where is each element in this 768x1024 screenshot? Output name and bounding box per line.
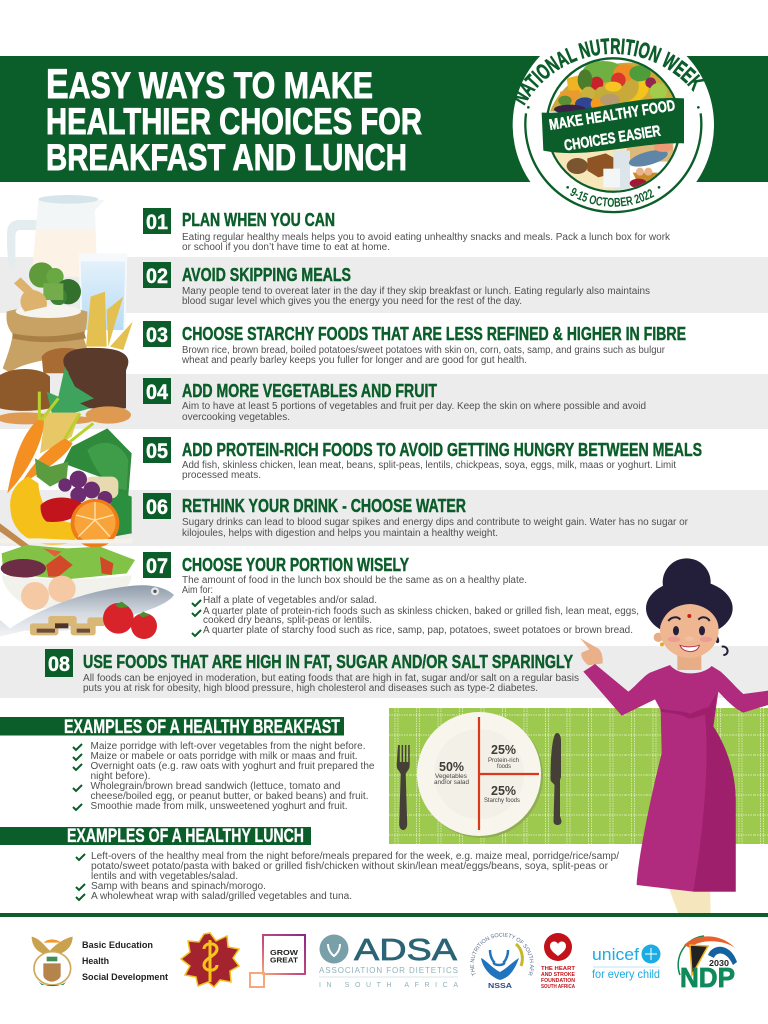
logo: Grow Great: GROW <box>270 948 299 957</box>
departments text: Basic Education <box>82 940 153 950</box>
item 06 <box>143 493 689 539</box>
heading 01: PLAN WHEN YOU CAN <box>182 210 335 230</box>
breakfast check marks <box>73 744 82 810</box>
body 07: cooked dry beans, split-peas or lentils. <box>203 615 372 626</box>
body 07: Half a plate of vegetables and/or salad. <box>203 595 377 606</box>
item 08 <box>45 649 579 694</box>
footer rule <box>0 913 768 917</box>
lentils <box>0 406 131 424</box>
lunch heading <box>0 825 311 847</box>
logo: coat of arms <box>32 937 73 986</box>
body 01 <box>182 232 671 253</box>
logo: NDP 2030 <box>678 936 737 993</box>
body 08 <box>83 673 579 694</box>
legs <box>668 887 711 915</box>
logo: Heart and Stroke Foundation: FOUNDATION <box>541 978 575 984</box>
item 03 <box>143 321 686 366</box>
logo: ADSA: IN SOUTH AFRICA <box>319 982 458 989</box>
item 04 <box>143 378 646 423</box>
logo: UNICEF: unicef <box>592 945 639 964</box>
plate: 25% <box>491 784 516 798</box>
body 07: A quarter plate of protein-rich foods such as skinless chicken, baked or grilled fish, lean meat, eggs, <box>203 606 639 617</box>
departments text <box>82 940 168 982</box>
item 01 <box>143 208 671 253</box>
heading 08: USE FOODS THAT ARE HIGH IN FAT, SUGAR AND/OR SALT SPARINGLY <box>83 652 573 672</box>
title: HEALTHIER CHOICES FOR <box>46 101 422 142</box>
lunch list: lentils and with vegetables/salad. <box>91 871 238 882</box>
logo: UNICEF <box>592 944 660 981</box>
breakfast list: cheese/boiled egg, or peanut butter, or baked beans) and fruit. <box>90 791 368 802</box>
body 04: Aim to have at least 5 portions of vegetables and fruit per day. Keep the skin on where possible and avoid <box>182 401 646 412</box>
plate: Vegetables <box>435 774 467 780</box>
grapes and mint <box>35 458 118 506</box>
glass of water <box>79 253 127 330</box>
departments text: Health <box>82 956 109 966</box>
dress <box>583 664 768 892</box>
body 03: wheat and pearly barley keeps you fuller for longer and are good for gut health. <box>181 355 527 366</box>
logo: National Nutrition Week badge: NATIONAL NUTRITION WEEK <box>516 38 704 106</box>
food column illustration <box>0 195 174 639</box>
departments text: Social Development <box>82 972 168 982</box>
icon: fork <box>397 745 410 830</box>
heading 06: RETHINK YOUR DRINK - CHOOSE WATER <box>182 496 466 516</box>
breakfast heading: EXAMPLES OF A HEALTHY BREAKFAST <box>64 716 340 738</box>
logo: ADSA: ADSA <box>354 932 457 967</box>
fish <box>0 585 174 637</box>
logo: NSSA <box>470 932 534 990</box>
title: EASY WAYS TO MAKE <box>46 60 373 107</box>
number 01: 01 <box>146 211 168 234</box>
item 07 <box>143 552 639 636</box>
body 07: Aim for: <box>182 585 213 596</box>
body 05: processed meats. <box>182 470 261 481</box>
body 06: kilojoules, helps with digestion and helps you maintain a healthy weight. <box>182 528 498 539</box>
lunch list: Samp with beans and spinach/morogo. <box>91 881 266 892</box>
orange <box>71 499 119 548</box>
body 02: blood sugar level which gives you the energy you need for the rest of the day. <box>182 296 522 307</box>
number 06: 06 <box>146 496 168 519</box>
logo: NSSA: NSSA <box>488 981 513 990</box>
icon: knife <box>550 733 562 825</box>
body 03 <box>181 345 666 366</box>
logo: ADSA <box>319 932 458 989</box>
bowl <box>2 575 132 608</box>
cabbage greens <box>63 428 132 537</box>
heading 04: ADD MORE VEGETABLES AND FRUIT <box>182 381 437 401</box>
body 05 <box>182 460 676 481</box>
eggs <box>21 576 76 610</box>
plate: foods <box>497 764 511 770</box>
plate: and/or salad <box>434 780 469 786</box>
body 01: or school if you don’t have time to eat at home. <box>182 242 390 253</box>
body 02 <box>182 286 650 307</box>
badge ring text <box>524 54 703 106</box>
woman pointing <box>580 558 768 915</box>
body 04: overcooking vegetables. <box>182 412 290 423</box>
lunch list: potato/sweet potato/pasta with baked or grilled fish/chicken without skin/lean meat/eggs/beans, soya, split-peas or <box>91 861 609 872</box>
logo: National Nutrition Week badge: 9-15 OCTOBER 2022 <box>570 188 654 207</box>
logo: National Nutrition Week badge: CHOICES EASIER <box>563 123 662 155</box>
logo: Heart and Stroke Foundation: AND STROKE <box>541 972 575 978</box>
item 02 <box>143 262 650 307</box>
logo: Heart and Stroke Foundation: THE HEART <box>541 966 576 972</box>
body 08: All foods can be enjoyed in moderation, but eating foods that are high in fat, sugar and/or salt on a regular basis <box>83 673 579 684</box>
number 05: 05 <box>146 440 168 463</box>
plate: Starchy foods <box>484 798 520 804</box>
tomatoes <box>103 602 157 639</box>
bread <box>0 348 128 411</box>
breakfast list: Maize porridge with left-over vegetables from the night before. <box>90 741 366 752</box>
breakfast list <box>73 741 375 812</box>
logo: National Nutrition Week badge <box>512 38 714 214</box>
healthy plate placemat <box>389 708 768 844</box>
head <box>646 558 733 658</box>
grey row bands <box>0 257 768 698</box>
body 07: A quarter plate of starchy food such as rice, samp, pap, potatoes, sweet potatoes or brown bread. <box>203 625 633 636</box>
logo: Heart and Stroke Foundation: SOUTH AFRICA <box>541 984 575 990</box>
plate <box>417 712 543 838</box>
logo: Grow Great: GREAT <box>270 956 298 964</box>
apple <box>41 497 83 522</box>
dress shading <box>693 693 736 892</box>
logo: UNICEF: for every child <box>592 967 660 981</box>
breakfast list: Wholegrain/brown bread sandwich (lettuce, tomato and <box>90 781 340 792</box>
number 07: 07 <box>146 555 168 578</box>
neck <box>677 652 701 670</box>
heading 02: AVOID SKIPPING MEALS <box>182 265 351 285</box>
grain sack <box>3 277 87 373</box>
title: BREAKFAST AND LUNCH <box>46 136 407 178</box>
wheat <box>86 292 133 350</box>
number 04: 04 <box>146 381 168 404</box>
breakfast list: Maize or mabele or oats porridge with milk or maas and fruit. <box>90 751 358 762</box>
salad plate <box>0 523 135 579</box>
number 02: 02 <box>146 265 168 288</box>
logo: ADSA: ASSOCIATION FOR DIETETICS <box>319 966 458 975</box>
pointing hand <box>580 638 603 665</box>
number 08: 08 <box>48 653 70 676</box>
plate: 50% <box>439 760 464 774</box>
logo: Grow Great <box>250 935 305 987</box>
lunch list: Left-overs of the healthy meal from the night before/meals prepared for the week, e.g. maize meal, porridge/rice/samp/ <box>91 851 619 862</box>
badge banner <box>542 98 684 153</box>
title <box>46 60 422 178</box>
body 07 <box>182 575 639 636</box>
jug of milk <box>7 195 105 277</box>
body 01: Eating regular healthy meals helps you to avoid eating unhealthy snacks and meals. Pack a lunch box for work <box>182 232 671 243</box>
body 05: Add fish, skinless chicken, lean meat, beans, split-peas, lentils, chickpeas, soya, eggs, milk, maas or yoghurt. Limit <box>182 460 676 471</box>
pineapple <box>40 367 94 453</box>
header band <box>0 56 768 182</box>
body 06: Sugary drinks can lead to blood sugar spikes and energy dips and contribute to weight gain. Water has no sugar or <box>182 517 689 528</box>
breakfast list: night before). <box>90 771 150 782</box>
broccoli <box>29 262 81 305</box>
lunch check marks <box>76 854 85 900</box>
check marks 07 <box>192 600 201 636</box>
heading 07: CHOOSE YOUR PORTION WISELY <box>182 555 409 575</box>
lunch list: A wholewheat wrap with salad/grilled vegetables and tuna. <box>91 891 352 902</box>
breakfast list: Overnight oats (e.g. raw oats with yoghurt and fruit prepared the <box>90 761 375 772</box>
logo: NSSA: THE NUTRITION SOCIETY OF SOUTH AFRICA <box>470 932 534 976</box>
plate: 25% <box>491 743 516 757</box>
plate: Protein-rich <box>488 758 519 764</box>
logo: NDP 2030: NDP <box>680 962 735 993</box>
body 06 <box>182 517 689 539</box>
number 08 <box>45 649 73 677</box>
breakfast heading <box>0 716 344 738</box>
body 08: puts you at risk for obesity, high blood pressure, high cholesterol and diseases such as type-2 diabetes. <box>83 683 538 694</box>
logo: Heart and Stroke Foundation <box>541 933 576 990</box>
logo: NDP 2030: 2030 <box>709 959 730 968</box>
lunch list <box>76 851 619 902</box>
carrots <box>7 392 93 493</box>
logo: National Nutrition Week badge: MAKE HEALTHY FOOD <box>548 97 676 134</box>
badge food illustration <box>547 61 677 193</box>
breakfast list: Smoothie made from milk, unsweetened yoghurt and fruit. <box>90 801 348 812</box>
body 02: Many people tend to overeat later in the day if they skip breakfast or lunch. Eating regularly also maintains <box>182 286 650 297</box>
body 03: Brown rice, brown bread, boiled potatoes/sweet potatoes with skin on, corn, oats, samp, and grains such as bulgur <box>182 345 666 356</box>
body 07: The amount of food in the lunch box should be the same as on a healthy plate. <box>182 575 527 586</box>
lunch heading: EXAMPLES OF A HEALTHY LUNCH <box>67 825 304 847</box>
item 05 <box>143 437 702 481</box>
bananas <box>10 477 78 545</box>
nuts <box>30 616 106 635</box>
body 04 <box>182 401 646 423</box>
number 03: 03 <box>146 324 168 347</box>
logo: military health star <box>181 933 239 987</box>
